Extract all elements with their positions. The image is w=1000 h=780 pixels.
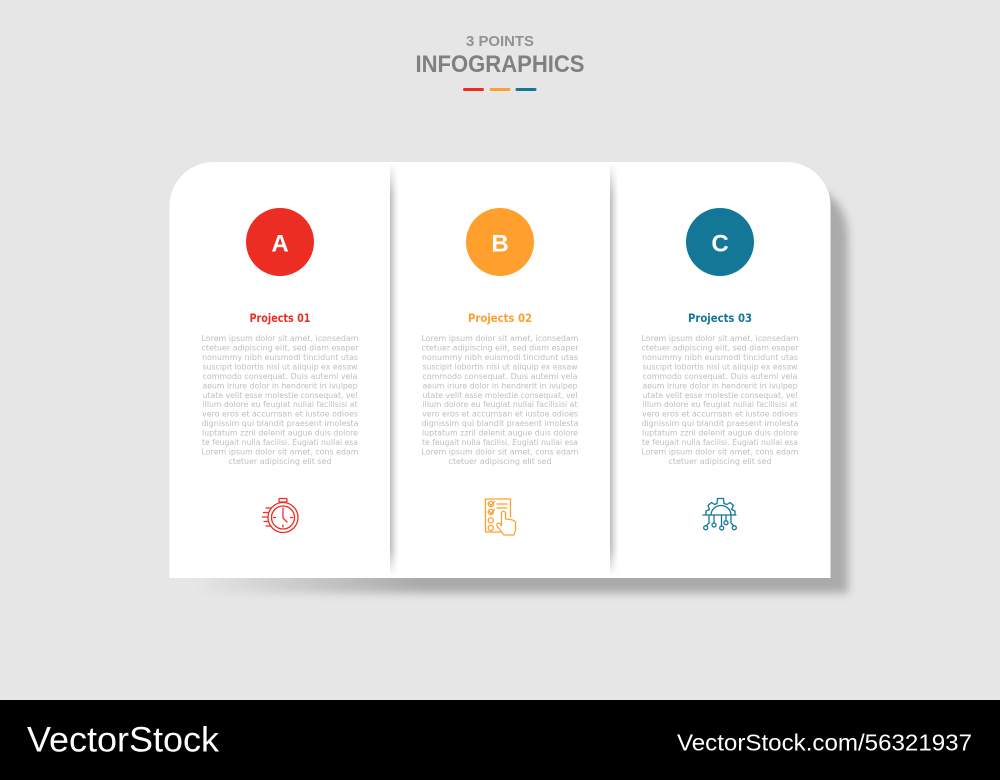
badge A: A [271, 230, 289, 258]
body text C: ctetuer adipiscing elit sed [668, 457, 772, 466]
body text A: illum dolore eu feugiat nullai facilisisi at [202, 400, 358, 409]
panel: C [642, 208, 799, 530]
body text A: vero eros et accumsan et iustoe odioes [202, 410, 358, 419]
body text B: ctetuer adipiscing elit sed [448, 457, 552, 466]
title line: 3 points: 3 POINTS [466, 33, 534, 50]
body text A: suscipit lobortis nisl ut aliquip ex easaw [202, 362, 358, 371]
body text B: te feugait nulla facilisi. Eugiati nullai esa [422, 438, 578, 447]
body text C: utate velit esse molestie consequat, vel [642, 391, 798, 400]
body text C: illum dolore eu feugiat nullai facilisisi at [642, 400, 798, 409]
body text C: commodo consequat. Duis autemi vela [642, 372, 798, 381]
body text A: nonummy nibh euismodi tincidunt utas [202, 353, 358, 362]
heading: Projects 01: Projects 01 [250, 311, 310, 325]
title [416, 33, 584, 91]
footer url: VectorStock.com/56321937 [677, 730, 972, 756]
body text B: utate velit esse molestie consequat, vel [422, 391, 578, 400]
body text C [642, 334, 799, 466]
panel: B [422, 208, 579, 535]
body text A: aeum iriure dolor in hendrerit in ivulpep [202, 381, 358, 390]
body text B [422, 334, 579, 466]
body text A: Lorem ipsum dolor sit amet, iconsedam [202, 334, 358, 343]
panel: A [202, 208, 359, 532]
body text A [202, 334, 359, 466]
body text B: luptatum zzril delenit augue duis dolore [422, 429, 578, 438]
badge C [686, 208, 754, 276]
body text B: ctetuer adipiscing elit, sed diam esaper [422, 344, 579, 352]
body text A: luptatum zzril delenit augue duis dolore [202, 429, 358, 438]
body text B: aeum iriure dolor in hendrerit in ivulpep [422, 381, 578, 390]
body text B: dignissim qui blandit praesent imolesta [422, 419, 578, 428]
icon: gear circuit [703, 498, 736, 530]
body text A: dignissim qui blandit praesent imolesta [202, 419, 358, 428]
title line: infographics: INFOGRAPHICS [416, 51, 584, 78]
body text A: te feugait nulla facilisi. Eugiati nullai esa [202, 438, 358, 447]
white card [170, 162, 830, 578]
body text B: suscipit lobortis nisl ut aliquip ex easaw [422, 362, 578, 371]
body text B: Lorem ipsum dolor sit amet, cons edam [422, 448, 578, 456]
body text A: ctetuer adipiscing elit sed [228, 457, 332, 466]
body text C: aeum iriure dolor in hendrerit in ivulpep [642, 381, 798, 390]
body text C: vero eros et accumsan et iustoe odioes [642, 410, 798, 419]
heading: Projects 02: Projects 02 [468, 311, 532, 325]
panel divider shadows [390, 162, 619, 576]
footer bar [0, 700, 1000, 780]
body text A: commodo consequat. Duis autemi vela [202, 372, 358, 381]
body text C: suscipit lobortis nisl ut aliquip ex easaw [642, 362, 798, 371]
badge A [246, 208, 314, 276]
body text B: illum dolore eu feugiat nullai facilisisi at [422, 400, 578, 409]
body text B: commodo consequat. Duis autemi vela [422, 372, 578, 381]
heading: Projects 03: Projects 03 [688, 311, 752, 325]
icon: checklist with hand [486, 499, 516, 535]
body text A: Lorem ipsum dolor sit amet, cons edam [202, 448, 358, 456]
body text A: utate velit esse molestie consequat, vel [202, 391, 358, 400]
body text C: ctetuer adipiscing elit, sed diam esaper [642, 344, 799, 352]
footer logo: VectorStock [27, 721, 220, 760]
body text C: luptatum zzril delenit augue duis dolore [642, 429, 798, 438]
card drop shadow [195, 186, 848, 593]
body text C: dignissim qui blandit praesent imolesta [642, 419, 798, 428]
body text C: nonummy nibh euismodi tincidunt utas [642, 353, 798, 362]
badge C: C [711, 230, 729, 258]
body text B: nonummy nibh euismodi tincidunt utas [422, 353, 578, 362]
colour dashes [463, 88, 536, 91]
badge B: B [491, 230, 509, 258]
body text B: Lorem ipsum dolor sit amet, iconsedam [422, 334, 578, 343]
body text C: te feugait nulla facilisi. Eugiati nullai esa [642, 438, 798, 447]
body text C: Lorem ipsum dolor sit amet, cons edam [642, 448, 798, 456]
badge B [466, 208, 534, 276]
icon: stopwatch [262, 498, 298, 532]
body text B: vero eros et accumsan et iustoe odioes [422, 410, 578, 419]
body text C: Lorem ipsum dolor sit amet, iconsedam [642, 334, 798, 343]
body text A: ctetuer adipiscing elit, sed diam esaper [202, 344, 359, 352]
